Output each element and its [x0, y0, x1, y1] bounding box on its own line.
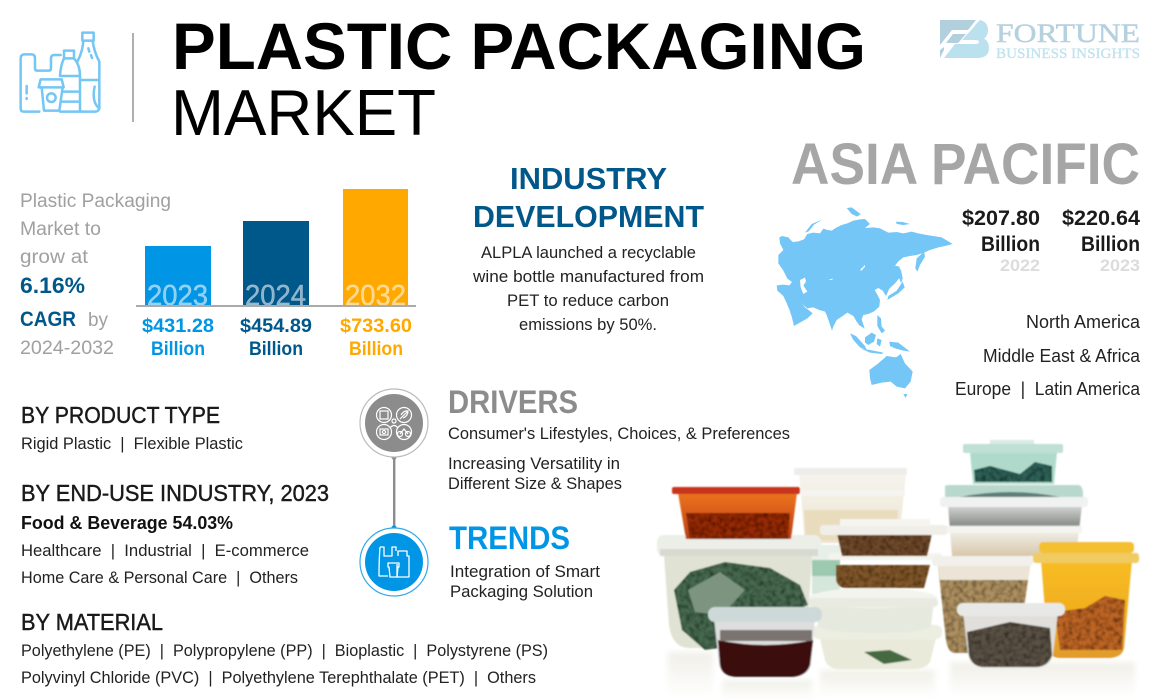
text: CAGR statement: grow at	[20, 247, 89, 268]
segment: by material: Polyvinyl Chloride (PVC) | Polyethylene Terephthalate (PET) | Others	[21, 668, 536, 687]
green lidded box	[963, 440, 1063, 484]
text: drivers body: Increasing Versatility in	[448, 454, 620, 473]
chart axis	[136, 305, 416, 307]
segment: by end-use industry: Food & Beverage 54.03%	[21, 513, 233, 533]
bar 2024: 2024	[245, 280, 306, 312]
segment: by end-use industry: Healthcare | Industrial | E-commerce	[21, 541, 309, 560]
segment: by end-use industry	[21, 480, 329, 587]
text: trends body: Packaging Solution	[450, 582, 593, 601]
text: industry development body: emissions by 50%.	[519, 315, 657, 334]
bar 2023: Billion	[151, 339, 205, 360]
text: CAGR statement: by	[88, 310, 108, 331]
bar 2032: $733.60	[340, 316, 412, 337]
stacked containers, back right	[940, 485, 1088, 556]
bar 2023	[142, 246, 214, 360]
icon: trends	[360, 528, 428, 596]
text: CAGR statement	[20, 191, 171, 359]
tan container	[932, 556, 1033, 653]
stat: Asia Pacific 2022: Billion	[981, 233, 1040, 256]
map: Asia Pacific	[777, 207, 953, 398]
logo: Fortune Business Insights	[940, 19, 1140, 62]
segment: by product type: Rigid Plastic | Flexible Plastic	[21, 434, 243, 453]
bar 2024: Billion	[249, 339, 303, 360]
small dark liquid cup	[708, 607, 822, 677]
stat: Asia Pacific 2022: $207.80	[962, 207, 1040, 230]
text: other regions: Middle East & Africa	[983, 346, 1141, 366]
photo: plastic food containers	[657, 440, 1139, 700]
stat: Asia Pacific 2023: Billion	[1081, 233, 1140, 256]
yellow container	[1033, 542, 1139, 658]
text: CAGR statement: Plastic Packaging	[20, 191, 171, 212]
text: trends body	[450, 562, 600, 601]
segment: by material	[21, 609, 548, 687]
text: industry development body: ALPLA launched a recyclable	[481, 243, 696, 262]
title	[171, 9, 866, 149]
text: CAGR statement: 6.16%	[20, 273, 85, 298]
bar 2023: 2023	[147, 280, 208, 312]
bar 2032: Billion	[349, 339, 403, 360]
brown containers	[820, 519, 947, 588]
icon: plastic packaging	[21, 33, 99, 112]
text: drivers body: Different Size & Shapes	[448, 474, 622, 493]
bar chart: market size	[136, 189, 416, 360]
stat: Asia Pacific 2023	[1062, 207, 1140, 275]
stat: Asia Pacific 2022	[962, 207, 1040, 275]
bar 2024: $454.89	[240, 316, 312, 337]
white round containers	[809, 588, 942, 669]
logo mark	[940, 20, 989, 58]
segment: by end-use industry: BY END-USE INDUSTRY, 2023	[21, 480, 329, 506]
text: CAGR statement: 2024-2032	[20, 338, 114, 359]
text: industry development body: wine bottle manufactured from	[472, 267, 704, 286]
bar 2032: 2032	[345, 280, 406, 312]
stat: Asia Pacific 2023: $220.64	[1062, 207, 1140, 230]
segment: by product type: BY PRODUCT TYPE	[21, 402, 220, 428]
heading: Asia Pacific: ASIA PACIFIC	[791, 132, 1140, 197]
table reflections	[668, 652, 1135, 700]
orange container	[672, 487, 800, 539]
text: CAGR statement: Market to	[20, 219, 101, 240]
heading: industry development: INDUSTRY	[510, 161, 667, 196]
back white box	[794, 468, 907, 543]
green stripes behind	[812, 545, 840, 594]
header divider	[132, 33, 134, 122]
segment: by material: Polyethylene (PE) | Polypropylene (PP) | Bioplastic | Polystyrene (PS)	[21, 641, 548, 660]
logo text: FORTUNE	[996, 19, 1140, 48]
text: industry development body	[472, 243, 704, 334]
text: drivers body: Consumer's Lifestyles, Choices, & Preferences	[448, 424, 790, 443]
clear dark contents cup	[957, 603, 1065, 668]
heading: industry development	[473, 161, 704, 234]
heading: trends: TRENDS	[449, 520, 570, 556]
text: industry development body: PET to reduce carbon	[507, 291, 669, 310]
text: drivers body	[448, 424, 790, 493]
title: PLASTIC PACKAGING	[172, 9, 866, 83]
icon: drivers	[360, 389, 428, 457]
bar 2032	[340, 189, 412, 360]
heading: industry development: DEVELOPMENT	[473, 199, 704, 234]
segment: by product type	[21, 402, 243, 453]
text: other regions	[955, 312, 1141, 399]
text: trends body: Integration of Smart	[450, 562, 600, 581]
segment: by material: BY MATERIAL	[21, 609, 163, 635]
text: other regions: Europe | Latin America	[955, 379, 1141, 399]
bar 2024	[240, 221, 312, 360]
heading: drivers: DRIVERS	[448, 384, 578, 420]
title: MARKET	[171, 76, 436, 149]
stat: Asia Pacific 2022: 2022	[1000, 256, 1040, 275]
stat: Asia Pacific 2023: 2023	[1100, 256, 1140, 275]
text: CAGR statement: CAGR	[20, 308, 76, 331]
connector: drivers to trends	[391, 454, 397, 531]
logo: Fortune Business Insights: BUSINESS INSIGHTS	[996, 46, 1140, 62]
big clear container with greens	[657, 535, 821, 650]
bar 2023: $431.28	[142, 316, 214, 337]
segment: by end-use industry: Home Care & Personal Care | Others	[21, 568, 298, 587]
text: other regions: North America	[1026, 312, 1141, 332]
